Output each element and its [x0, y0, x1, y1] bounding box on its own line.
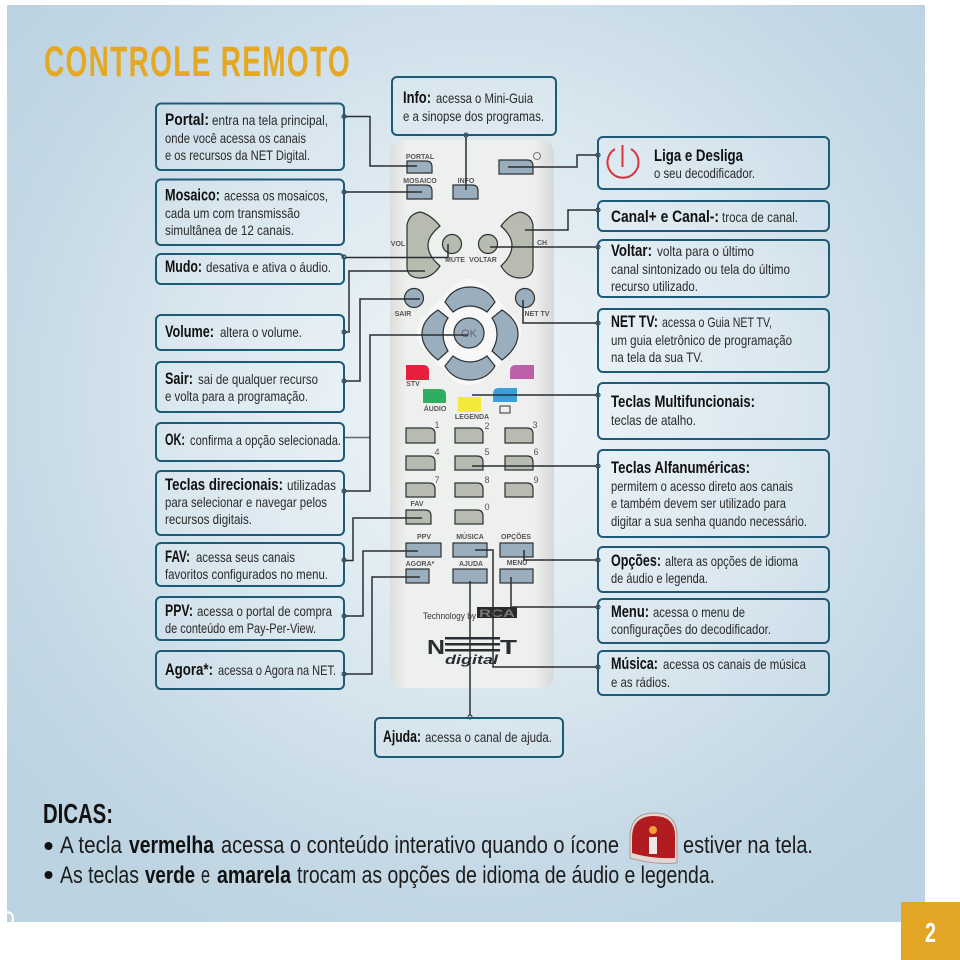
- callout: Liga e Desliga: Liga e Desliga: [654, 147, 744, 165]
- icon: interactive i: [630, 813, 677, 863]
- remote control: [390, 140, 554, 688]
- brand logos: T: [500, 637, 517, 659]
- callout: Canal: [598, 201, 829, 231]
- tip 2: trocam as opções de idioma de áudio e legenda.: [297, 862, 715, 889]
- callout: Música: [598, 651, 829, 695]
- tip 2: amarela: [217, 862, 292, 889]
- mute and voltar buttons: [442, 234, 498, 264]
- color buttons: ÁUDIO: [424, 404, 447, 413]
- tip 2: [44, 862, 715, 889]
- number keys: 6: [533, 447, 539, 457]
- callout: Menu: configurações do decodificador.: [611, 621, 771, 637]
- callout: Portal: [156, 104, 344, 170]
- callout: Info: [392, 77, 556, 135]
- number keys: 1: [434, 420, 440, 430]
- callout: NET TV: NET TV:: [611, 313, 658, 331]
- callout: PPV: acessa o portal de compra: [197, 603, 332, 619]
- callout: Info: e a sinopse dos programas.: [403, 108, 544, 124]
- corner artefact: [7, 912, 13, 922]
- number keys: 0: [484, 502, 490, 512]
- function keys: MENU: [507, 560, 527, 567]
- callout: Sair: e volta para a programação.: [165, 388, 308, 404]
- callout: Opções: [598, 547, 829, 592]
- directional pad: OK: [461, 328, 478, 340]
- callout: Mudo: Mudo:: [165, 258, 202, 276]
- function keys: AGORA*: [406, 561, 435, 568]
- directional pad: [417, 279, 521, 386]
- callout: Teclas Alfanuméricas: digitar a sua senha quando necessário.: [611, 513, 807, 529]
- callout: Mudo: [156, 254, 344, 284]
- number keys: FAV: [410, 501, 424, 508]
- callout: Teclas Multifuncionais: Teclas Multifuncionais:: [611, 393, 755, 411]
- callout: NET TV: [598, 309, 829, 372]
- callout: Portal: e os recursos da NET Digital.: [165, 147, 310, 163]
- number keys: 2: [484, 421, 490, 431]
- volume and channel rockers: CH: [537, 240, 547, 247]
- color buttons: STV: [406, 381, 420, 388]
- callout: Teclas Alfanuméricas: e também devem ser utilizado para: [611, 495, 786, 511]
- callout: Música: e as rádios.: [611, 674, 670, 690]
- callout: OK: OK:: [165, 431, 185, 449]
- callout: OK: confirma a opção selecionada.: [190, 432, 341, 448]
- brand logos: N: [427, 637, 445, 659]
- page number: 2: [925, 917, 936, 948]
- callout: Voltar: volta para o último: [657, 243, 754, 259]
- tip 1: [44, 813, 813, 863]
- remote body: [390, 140, 554, 688]
- callout: Voltar: canal sintonizado ou tela do último: [611, 261, 790, 277]
- number keys: 4: [434, 447, 440, 457]
- callout: Ajuda: [375, 718, 563, 757]
- callout: Menu: [598, 599, 829, 643]
- callout: Volume: Volume:: [165, 323, 214, 341]
- callout: Sair: Sair:: [165, 370, 193, 388]
- mute and voltar buttons: VOLTAR: [469, 257, 497, 264]
- callout: Agora: [156, 651, 344, 689]
- mute and voltar buttons: MUTE: [445, 257, 465, 264]
- number keys: 8: [484, 475, 490, 485]
- function keys: PPV: [417, 534, 431, 541]
- callout: Mosaico: cada um com transmissão: [165, 205, 300, 221]
- callout: Teclas Alfanuméricas: Teclas Alfanuméricas:: [611, 459, 750, 477]
- tip 2: As teclas: [60, 862, 139, 889]
- callout: OK: [156, 423, 344, 461]
- callout: Portal: onde você acessa os canais: [165, 130, 306, 146]
- callout: Sair: [156, 362, 344, 412]
- function keys: MÚSICA: [456, 532, 484, 541]
- tip 1: A tecla: [60, 832, 123, 859]
- callout: Teclas direcionais: para selecionar e navegar pelos: [165, 494, 327, 510]
- top buttons: INFO: [458, 178, 475, 185]
- tip 1: acessa o conteúdo interativo quando o ícone: [221, 832, 619, 859]
- top buttons: PORTAL: [406, 154, 435, 161]
- callout: Teclas Multifuncionais: teclas de atalho.: [611, 412, 696, 428]
- callout: Portal: Portal:: [165, 111, 209, 129]
- sair and net tv buttons: NET TV: [525, 311, 550, 318]
- callout: Info: Info:: [403, 89, 431, 107]
- brand logos: RCA: [479, 608, 515, 620]
- tip 1: estiver na tela.: [683, 832, 813, 859]
- callout: Ajuda: Ajuda:: [383, 728, 421, 746]
- callout: PPV: PPV:: [165, 602, 193, 620]
- callout: Voltar: [598, 240, 829, 297]
- callout: Menu: Menu:: [611, 603, 649, 621]
- callout: Portal: entra na tela principal,: [212, 112, 328, 128]
- callout: FAV: favoritos configurados no menu.: [165, 566, 328, 582]
- callout: Menu: acessa o menu de: [653, 604, 745, 620]
- tip 2: e: [201, 862, 210, 889]
- title: CONTROLE REMOTO: [44, 38, 351, 86]
- callout: Mosaico: Mosaico:: [165, 186, 220, 204]
- number keys: 3: [532, 420, 538, 430]
- callout: Voltar: recurso utilizado.: [611, 278, 698, 294]
- tip 1: vermelha: [129, 832, 215, 859]
- callout: Volume: [156, 315, 344, 350]
- callout: Canal: troca de canal.: [722, 209, 798, 225]
- top buttons: MOSAICO: [403, 178, 437, 185]
- tips section: [43, 798, 813, 889]
- function keys: AJUDA: [459, 561, 483, 568]
- callout: Sair: sai de qualquer recurso: [198, 371, 318, 387]
- callout: Teclas Multifuncionais: [598, 383, 829, 439]
- callout: FAV: FAV:: [165, 548, 190, 566]
- number keys: [406, 420, 539, 524]
- brand logos: digital: [445, 652, 499, 667]
- sair and net tv buttons: SAIR: [395, 311, 411, 318]
- callout: Voltar: Voltar:: [611, 242, 652, 260]
- color buttons: [406, 365, 534, 421]
- brand logos: Technology by: [423, 611, 476, 621]
- sair and net tv buttons: [395, 288, 550, 318]
- number keys: 5: [484, 447, 490, 457]
- callout: Música: acessa os canais de música: [663, 656, 806, 672]
- callout: Agora: acessa o Agora na NET.: [218, 662, 336, 678]
- callout: NET TV: acessa o Guia NET TV,: [662, 314, 772, 330]
- brand logos: [423, 607, 517, 667]
- function keys: [406, 532, 533, 583]
- callout: Teclas direcionais: [156, 471, 344, 535]
- connector lines: [342, 114, 600, 719]
- callout: Teclas Alfanuméricas: [598, 450, 829, 537]
- callout: Música: Música:: [611, 655, 658, 673]
- callout: NET TV: na tela da sua TV.: [611, 349, 703, 365]
- volume and channel rockers: [391, 212, 547, 278]
- callout: Agora: Agora*:: [165, 661, 213, 679]
- callout: Teclas Alfanuméricas: permitem o acesso direto aos canais: [611, 478, 793, 494]
- callout: FAV: acessa seus canais: [196, 549, 295, 565]
- icon: power symbol: [608, 145, 638, 178]
- callout: NET TV: um guia eletrônico de programação: [611, 332, 792, 348]
- callout: Canal: Canal+ e Canal-:: [611, 208, 719, 226]
- callout: PPV: [156, 597, 344, 640]
- callout: Teclas direcionais: Teclas direcionais:: [165, 476, 283, 494]
- number keys: 9: [533, 475, 539, 485]
- callout: Liga e Desliga: o seu decodificador.: [654, 165, 755, 181]
- callout: Info: acessa o Mini-Guia: [436, 90, 533, 106]
- callout: Mosaico: acessa os mosaicos,: [224, 188, 328, 204]
- callout: Teclas direcionais: recursos digitais.: [165, 511, 252, 527]
- number keys: 7: [434, 475, 440, 485]
- callout: Mosaico: simultânea de 12 canais.: [165, 222, 294, 238]
- volume and channel rockers: VOL: [391, 241, 406, 248]
- callout: Opções: Opções:: [611, 552, 661, 570]
- callout: Ajuda: acessa o canal de ajuda.: [425, 729, 552, 745]
- callout: FAV: [156, 543, 344, 586]
- callout: Mosaico: [156, 180, 344, 245]
- callout: Opções: altera as opções de idioma: [665, 553, 798, 569]
- page number: [901, 902, 960, 960]
- function keys: OPÇÕES: [501, 532, 531, 541]
- color buttons: LEGENDA: [455, 414, 489, 421]
- tips heading: DICAS:: [43, 798, 113, 829]
- callout: Opções: de áudio e legenda.: [611, 570, 708, 586]
- callout: Mudo: desativa e ativa o áudio.: [206, 259, 331, 275]
- callout: Teclas direcionais: utilizadas: [287, 477, 336, 493]
- callout: Volume: altera o volume.: [220, 324, 302, 340]
- callout: Liga e Desliga: [598, 137, 829, 189]
- top buttons: [403, 152, 540, 199]
- callout: PPV: de conteúdo em Pay-Per-View.: [165, 620, 316, 636]
- tip 2: verde: [145, 862, 195, 889]
